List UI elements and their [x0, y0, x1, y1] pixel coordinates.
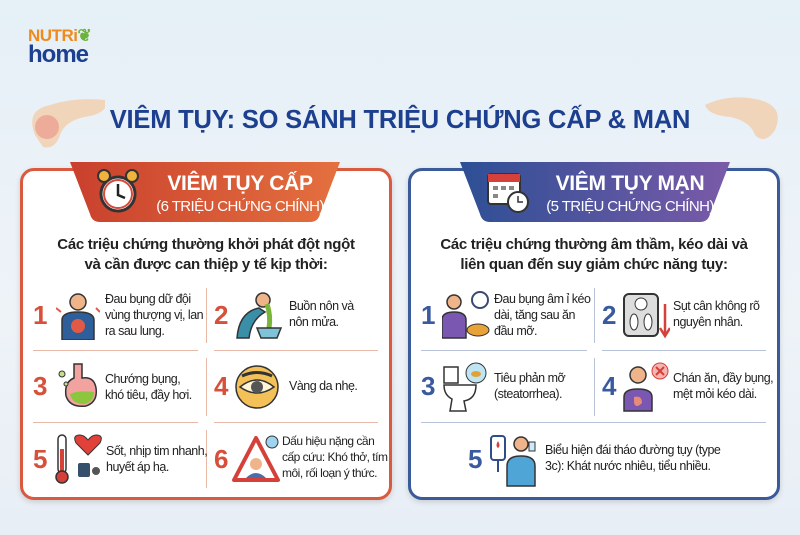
- item: acute 3: khó tiêu, đầy hơi.: [105, 388, 192, 402]
- item: chronic 2: Sụt cân không rõ: [673, 299, 760, 313]
- icon: yellow eye: [235, 365, 279, 409]
- item: chronic 3: Tiêu phản mỡ: [494, 371, 565, 385]
- item: acute 1: 1: [33, 300, 47, 330]
- item: acute 3: 3: [33, 371, 47, 401]
- icon: alarm clock: [97, 169, 139, 212]
- decorative pancreas left: [32, 99, 105, 148]
- ribbon: acute: (6 TRIỆU CHỨNG CHÍNH): [156, 198, 324, 215]
- item: acute 3: Chướng bụng,: [105, 372, 180, 386]
- item: chronic 3: 3: [421, 371, 435, 401]
- item: chronic 2: [602, 293, 760, 338]
- item: acute 1: vùng thượng vị, lan: [105, 308, 203, 322]
- icon: warning triangle: [232, 436, 280, 482]
- item: acute 2: 2: [214, 300, 228, 330]
- ribbon: chronic: [460, 162, 730, 222]
- item: chronic 1: dài, tăng sau ăn: [494, 308, 575, 322]
- item: acute 6: 6: [214, 444, 228, 474]
- decorative pancreas right: [705, 97, 778, 139]
- item: acute 1: ra sau lung.: [105, 324, 164, 338]
- item: acute 5: [33, 434, 207, 484]
- subtitle acute: [57, 236, 355, 273]
- ribbon: chronic: (5 TRIỆU CHỨNG CHÍNH): [546, 198, 714, 215]
- item: chronic 3: [421, 362, 566, 412]
- icon: stomach: [58, 363, 98, 407]
- panel: chronic: [408, 168, 780, 500]
- icon: vomiting: [236, 292, 282, 339]
- item: acute 4: 4: [214, 371, 228, 401]
- subtitle chronic: liên quan đến suy giảm chức năng tụy:: [460, 256, 728, 273]
- item: acute 6: Dấu hiệu nặng cần: [282, 434, 374, 448]
- subtitle acute: và cần được can thiệp y tế kịp thời:: [84, 256, 328, 273]
- grid lines chronic: [421, 350, 587, 351]
- icon: man with food and clock: [442, 291, 490, 339]
- icon: glucometer drinking: [490, 435, 536, 487]
- item: chronic 4: [602, 362, 773, 412]
- item: acute 1: Đau bụng dữ đội: [105, 292, 191, 306]
- icon: toilet: [443, 362, 486, 412]
- item: chronic 1: [421, 291, 590, 339]
- item: acute 4: [214, 365, 357, 409]
- item: chronic 5: 5: [468, 444, 482, 474]
- item: chronic 5: 3c): Khát nước nhiêu, tiểu nhiều.: [545, 459, 710, 473]
- logo: [28, 26, 91, 68]
- item: acute 5: Sốt, nhịp tim nhanh,: [106, 444, 207, 458]
- item: chronic 4: mệt mỏi kéo dài.: [673, 387, 757, 401]
- icon: abdominal pain: [56, 293, 100, 340]
- item: chronic 1: đầu mỡ.: [494, 324, 537, 338]
- item: chronic 2: 2: [602, 300, 616, 330]
- item: acute 2: Buồn nôn và: [289, 299, 354, 313]
- icon: man with stomach: [623, 362, 668, 412]
- item: acute 4: Vàng da nhẹ.: [289, 379, 357, 393]
- icon: thermometer heart: [55, 434, 102, 484]
- item: acute 6: môi, rối loạn ý thức.: [282, 466, 377, 480]
- item: chronic 4: 4: [602, 371, 616, 401]
- item: acute 2: nôn mửa.: [289, 315, 339, 329]
- ribbon: acute: VIÊM TỤY CẤP: [167, 172, 313, 195]
- panel: acute: [20, 168, 392, 500]
- item: chronic 5: Biểu hiện đái tháo đường tụy (type: [545, 443, 720, 457]
- title: VIÊM TỤY: SO SÁNH TRIỆU CHỨNG CẤP & MẠN: [110, 106, 690, 134]
- ribbon: chronic: VIÊM TỤY MẠN: [556, 172, 704, 195]
- item: acute 6: [214, 434, 388, 482]
- item: acute 2: [214, 292, 354, 339]
- item: chronic 3: (steatorrhea).: [494, 387, 562, 401]
- icon: calendar clock: [487, 173, 529, 213]
- item: acute 3: [33, 363, 192, 407]
- subtitle chronic: Các triệu chứng thường âm thầm, kéo dài và: [440, 236, 748, 253]
- item: chronic 2: nguyên nhân.: [673, 315, 743, 329]
- logo: NUTRi❦: [28, 26, 91, 45]
- subtitle acute: Các triệu chứng thường khởi phát đột ngột: [57, 236, 355, 253]
- icon: scale: [623, 293, 670, 338]
- item: acute 5: 5: [33, 444, 47, 474]
- item: chronic 1: Đau bụng âm ỉ kéo: [494, 292, 590, 306]
- item: chronic 5: [468, 435, 720, 487]
- item: acute 6: cấp cứu: Khó thở, tím: [282, 450, 387, 464]
- item: acute 5: huyết áp hạ.: [106, 460, 169, 474]
- grid lines acute: [33, 350, 198, 351]
- logo: home: [28, 41, 88, 68]
- item: acute 1: [33, 292, 203, 340]
- subtitle chronic: [440, 236, 748, 273]
- ribbon: acute: [70, 162, 340, 222]
- item: chronic 4: Chán ăn, đầy bụng,: [673, 371, 773, 385]
- item: chronic 1: 1: [421, 300, 435, 330]
